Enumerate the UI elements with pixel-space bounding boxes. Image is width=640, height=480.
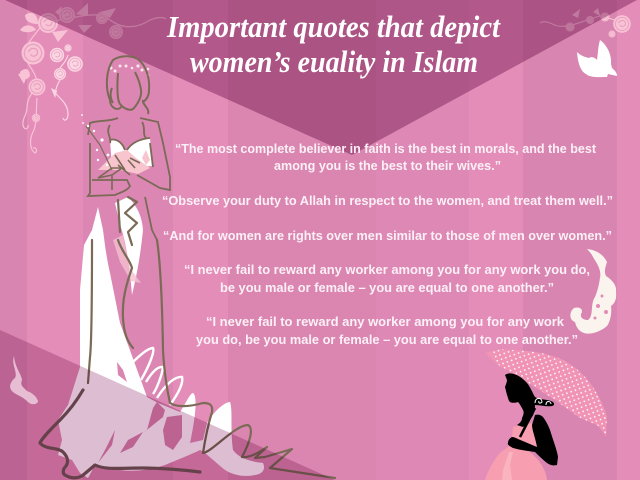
quote 1: “The most complete believer in faith is the best in morals, and the best	[175, 142, 597, 156]
illustration: woman with umbrella	[485, 349, 607, 480]
icon: smoke swirl	[10, 356, 38, 404]
title: Important quotes that depict	[166, 9, 501, 44]
bride: bouquet	[86, 125, 150, 190]
icon: dove	[577, 40, 617, 77]
quote 1: among you is the best to their wives.”	[274, 159, 501, 173]
silhouette: arm	[508, 415, 558, 465]
umbrella	[485, 349, 607, 437]
quote 4	[184, 263, 590, 295]
dress ribbon	[502, 452, 513, 480]
floral vine: banner top	[45, 3, 166, 39]
illustration: bride	[40, 56, 335, 478]
quote 4: be you male or female – you are equal to one another.”	[220, 281, 554, 295]
bottom left triangle	[0, 330, 335, 480]
title: women’s euality in Islam	[190, 44, 478, 79]
top chevron banner	[5, 0, 637, 155]
bride: hair and face outline	[107, 56, 149, 114]
hair curls	[535, 398, 551, 405]
bride dress: ribbon	[115, 197, 143, 295]
dress	[485, 423, 547, 480]
bride dress: pink ribbon detail	[113, 235, 141, 283]
bride: skirt outlines	[88, 197, 335, 478]
quote 3: “And for women are rights over men similar to those of men over women.”	[163, 229, 612, 243]
quote 1	[175, 142, 597, 173]
quote 2: “Observe your duty to Allah in respect to the women, and treat them well.”	[162, 194, 613, 208]
bride dress: thin white loops	[132, 348, 182, 405]
quote 4: “I never fail to reward any worker among you for any work you do,	[184, 263, 590, 277]
bride dress: bodice	[110, 138, 152, 168]
quote 5	[196, 315, 578, 347]
silhouette: head and hair	[505, 373, 554, 427]
quote 5: “I never fail to reward any worker among you for any work	[206, 315, 564, 329]
title	[166, 9, 501, 79]
floral vine: top left	[18, 13, 83, 153]
quote 5: you do, be you male or female – you are equal to one another.”	[196, 333, 578, 347]
bride dress: speck	[117, 362, 127, 382]
icon: white swirl	[570, 249, 616, 334]
umbrella handle	[520, 408, 535, 437]
bride: hem outline	[40, 390, 200, 478]
floral vine: top right	[540, 8, 631, 38]
bride: torso and arm outline	[88, 118, 170, 240]
bride: flower crown	[81, 64, 149, 124]
bride dress: hem holes	[98, 402, 182, 463]
bride dress: white skirt	[58, 207, 264, 478]
